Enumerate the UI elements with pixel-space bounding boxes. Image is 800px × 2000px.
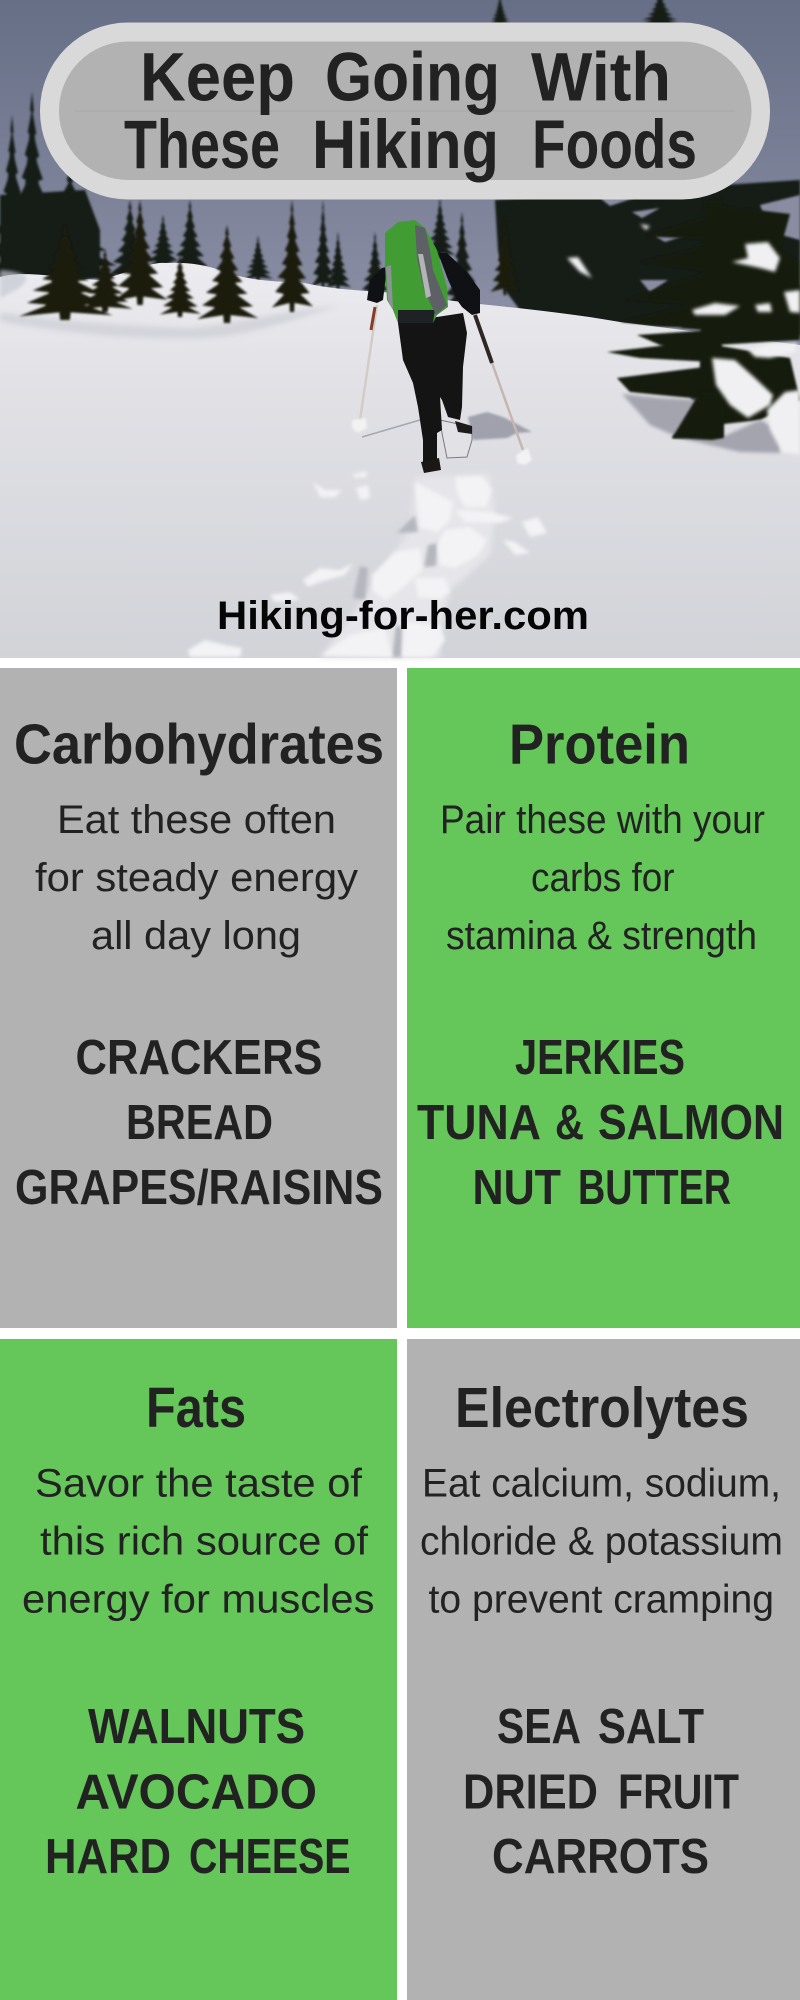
- legs: [398, 313, 467, 467]
- description: chloride & potassium: [420, 1520, 783, 1564]
- description: Pair these with your: [440, 798, 765, 842]
- heading: Electrolytes: [455, 1376, 749, 1440]
- panel: carbohydrates: [0, 668, 397, 1328]
- title line 1: Going: [325, 38, 500, 116]
- food list: [417, 1031, 784, 1215]
- food list: [15, 1031, 383, 1215]
- green backpack: [385, 220, 448, 323]
- shadow under spruce: [622, 394, 783, 453]
- big foreground spruce: [607, 200, 800, 438]
- description: stamina & strength: [446, 914, 757, 958]
- snow on spruce branches: [567, 224, 800, 455]
- title line 2: [124, 106, 697, 183]
- description: Eat these often: [57, 798, 336, 842]
- description: [440, 798, 765, 958]
- title line 1: With: [531, 38, 671, 116]
- snowshoe: [440, 420, 472, 458]
- food list: [463, 1700, 739, 1884]
- food list: FRUIT: [618, 1766, 739, 1820]
- food list: CRACKERS: [76, 1031, 322, 1085]
- food list: DRIED: [463, 1766, 598, 1820]
- hiker shadow on snow: [468, 412, 532, 440]
- description: for steady energy: [35, 856, 358, 900]
- background tree line: [0, 0, 685, 312]
- large conifer mass on right, behind snow: [495, 180, 800, 335]
- food list: WALNUTS: [88, 1700, 305, 1754]
- food list: BREAD: [126, 1096, 273, 1150]
- food list: GRAPES/RAISINS: [15, 1161, 383, 1215]
- food list: SEA: [497, 1700, 581, 1754]
- description: [420, 1462, 783, 1622]
- title line 2: Hiking: [312, 106, 499, 183]
- footprint trail: [188, 471, 547, 658]
- description: to prevent cramping: [428, 1578, 774, 1622]
- description: [35, 798, 358, 958]
- snow drift: [0, 306, 340, 338]
- food list: [45, 1700, 350, 1884]
- panel: protein: [407, 668, 800, 1328]
- food list: CHEESE: [189, 1830, 350, 1884]
- foreground conifers: [19, 200, 520, 323]
- title banner: [40, 22, 770, 200]
- description: energy for muscles: [22, 1578, 374, 1622]
- food list: TUNA: [417, 1096, 541, 1150]
- panel: electrolytes: [407, 1339, 800, 2000]
- trekking poles: [360, 305, 377, 420]
- description: Eat calcium, sodium,: [422, 1462, 781, 1506]
- food list: SALT: [598, 1700, 704, 1754]
- description: Savor the taste of: [35, 1462, 363, 1506]
- snow slope: [0, 263, 800, 658]
- food list: JERKIES: [515, 1031, 685, 1085]
- title line 1: Keep: [140, 38, 295, 116]
- hiker: [352, 220, 532, 473]
- title line 2: Foods: [532, 106, 697, 183]
- right arm: [438, 253, 480, 315]
- food list: CARROTS: [492, 1830, 709, 1884]
- description: [22, 1462, 374, 1622]
- description: all day long: [91, 914, 301, 958]
- food list: BUTTER: [578, 1161, 731, 1215]
- food list: HARD: [45, 1830, 171, 1884]
- description: this rich source of: [40, 1520, 369, 1564]
- heading: Fats: [146, 1376, 246, 1440]
- description: carbs for: [531, 856, 674, 900]
- hero photo: snowy hillside with hiker: [0, 0, 800, 658]
- heading: Protein: [509, 712, 690, 776]
- panel: fats: [0, 1339, 397, 2000]
- food list: AVOCADO: [76, 1766, 317, 1820]
- sky gaps between right branches: [600, 195, 800, 335]
- food list: &: [555, 1096, 584, 1150]
- title line 2: These: [124, 106, 280, 183]
- left arm: [367, 267, 387, 303]
- heading: Carbohydrates: [14, 712, 384, 776]
- title line 1: [140, 38, 671, 116]
- food list: NUT: [472, 1161, 561, 1215]
- website credit: Hiking-for-her.com: [217, 594, 589, 638]
